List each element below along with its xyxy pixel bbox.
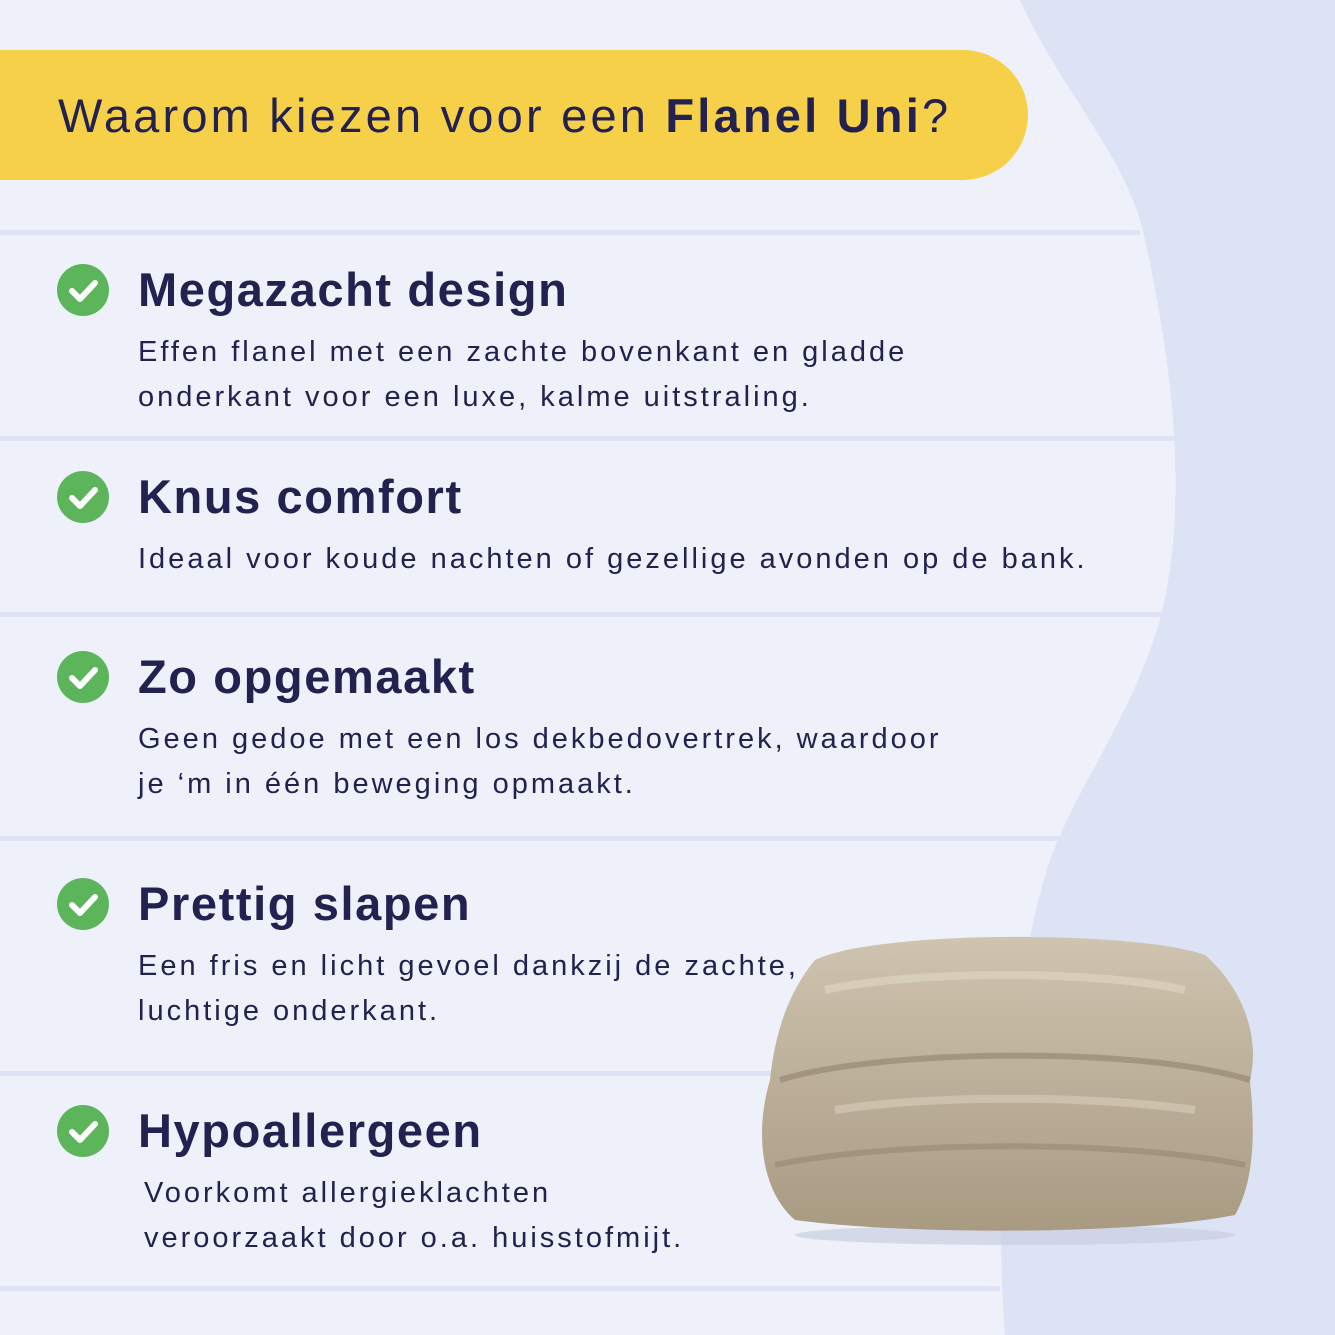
text: Geen gedoe met een los dekbedovertrek, waardoor: [138, 723, 942, 755]
image: folded blanket: [762, 936, 1253, 1245]
heading: Zo opgemaakt: [138, 650, 476, 703]
text: je ‘m in één beweging opmaakt.: [138, 768, 636, 800]
text: luchtige onderkant.: [138, 995, 440, 1027]
icon: check: [57, 1105, 109, 1157]
item: Megazacht design: [57, 263, 907, 413]
text: [138, 950, 799, 1027]
title: Waarom kiezen voor een Flanel Uni?: [58, 89, 951, 142]
text: Een fris en licht gevoel dankzij de zachte,: [138, 950, 799, 982]
heading: Megazacht design: [138, 263, 568, 316]
text: Effen flanel met een zachte bovenkant en gladde: [138, 336, 907, 368]
item: Hypoallergeen: [57, 1104, 684, 1254]
item: Knus comfort: [57, 470, 1088, 575]
item: Prettig slapen: [57, 877, 799, 1027]
text: [138, 336, 907, 413]
item: Zo opgemaakt: [57, 650, 942, 800]
text: veroorzaakt door o.a. huisstofmijt.: [144, 1222, 684, 1254]
heading: Hypoallergeen: [138, 1104, 483, 1157]
heading: Prettig slapen: [138, 877, 471, 930]
text: onderkant voor een luxe, kalme uitstraling.: [138, 381, 812, 413]
text: [144, 1177, 684, 1254]
text: [137, 723, 942, 800]
icon: check: [57, 471, 109, 523]
title: [0, 50, 1028, 180]
icon: check: [57, 878, 109, 930]
text: Voorkomt allergieklachten: [144, 1177, 551, 1209]
icon: check: [57, 264, 109, 316]
heading: Knus comfort: [138, 470, 463, 523]
text: Ideaal voor koude nachten of gezellige avonden op de bank.: [138, 543, 1088, 575]
icon: check: [57, 651, 109, 703]
